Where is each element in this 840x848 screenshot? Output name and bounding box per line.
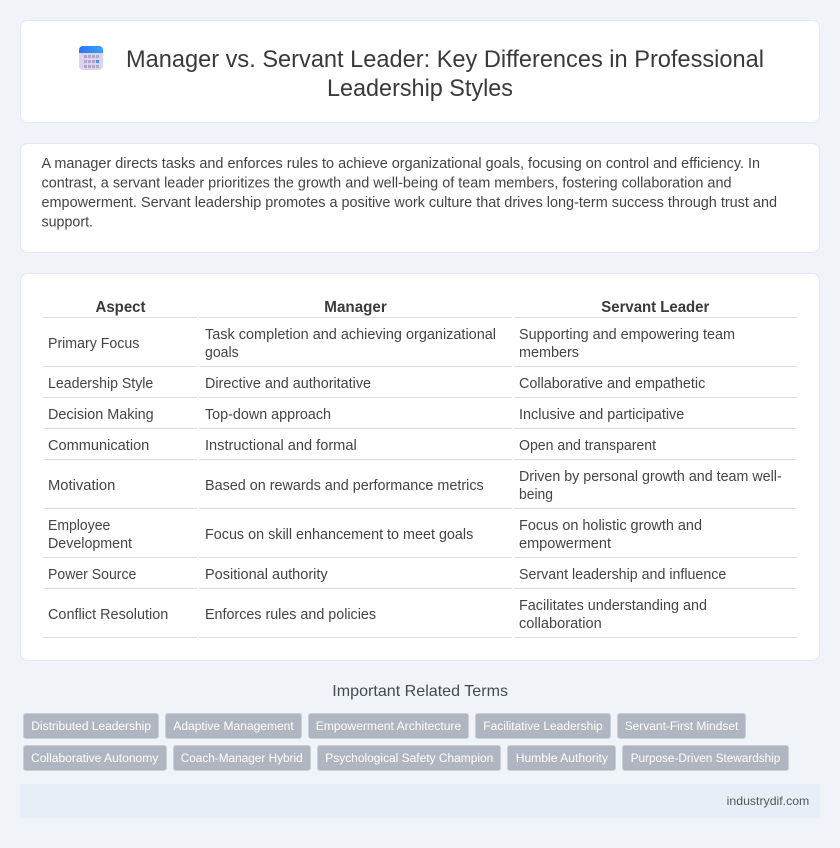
row: decision making: Inclusive and participative [519,407,684,423]
panel: intro text: A manager directs tasks and enforces rules to achieve organizational goals, focusing on control and efficiency. In [42,156,760,172]
panel: title header [20,20,820,122]
chip: psychological safety champion [318,746,500,770]
chip: servant-first mindset [618,714,746,738]
row: motivation: being [519,487,553,503]
row: primary focus: members [519,345,579,361]
table header [43,299,797,318]
chip: facilitative leadership: Facilitative Leadership [483,719,603,733]
row: employee development: Focus on holistic growth and [519,518,702,534]
row: communication: Open and transparent [519,438,656,454]
row: primary focus: Task completion and achieving organizational [205,327,496,343]
row: power source: Power Source [48,567,136,583]
chip: distributed leadership [24,714,158,738]
row: conflict resolution: Facilitates understanding and [519,598,707,614]
row: power source: Positional authority [205,567,329,583]
row: communication: Instructional and formal [205,438,357,454]
chip: distributed leadership: Distributed Leadership [31,719,151,733]
row: decision making [43,407,797,429]
panel: intro text: support. [42,214,93,230]
row: employee development: Employee [48,518,110,534]
chip: coach-manager hybrid: Coach-Manager Hybrid [181,751,303,765]
panel: intro text: contrast, a servant leader prioritizes the growth and well-being of team members, fostering collaboration and [42,176,732,192]
chip: purpose-driven stewardship: Purpose-Driven Stewardship [631,751,781,765]
row: motivation: Driven by personal growth and team well- [519,469,782,485]
panel: intro text [20,144,820,252]
row: leadership style: Leadership Style [48,376,153,392]
chip: humble authority: Humble Authority [516,751,609,765]
row: motivation: Based on rewards and performance metrics [205,478,484,494]
row: conflict resolution: Conflict Resolution [48,607,168,623]
row: conflict resolution [43,598,797,638]
row: communication [43,438,797,460]
row: motivation: Motivation [48,478,115,494]
row: employee development: Development [48,536,132,552]
row: decision making: Decision Making [48,407,154,423]
footer: industrydif.com [727,794,809,808]
row: leadership style: Collaborative and empathetic [519,376,705,392]
row: communication: Communication [48,438,149,454]
chip: adaptive management: Adaptive Management [173,719,294,733]
row: power source [43,567,797,589]
footer [20,784,820,818]
icon: calendar [79,46,103,70]
panel: intro text: empowerment. Servant leadership promotes a positive work culture that drives long-term success through trust and [42,195,777,211]
row: employee development [43,518,797,558]
related term chips [24,714,788,770]
chip: servant-first mindset: Servant-First Mindset [625,719,739,733]
chip: empowerment architecture [308,714,468,738]
chip: collaborative autonomy [24,746,166,770]
chip: humble authority [508,746,616,770]
row: leadership style: Directive and authoritative [205,376,371,392]
chip: adaptive management [166,714,302,738]
row: employee development: Focus on skill enhancement to meet goals [205,527,473,543]
row: motivation [43,469,797,509]
chip: coach-manager hybrid [174,746,310,770]
row: conflict resolution: collaboration [519,616,602,632]
chip: facilitative leadership [476,714,610,738]
title [126,46,764,102]
row: primary focus: Supporting and empowering team [519,327,735,343]
heading: important related terms: Important Related Terms [332,683,508,700]
title: Manager vs. Servant Leader: Key Differences in Professional [126,46,764,73]
row: power source: Servant leadership and influence [519,567,726,583]
row: employee development: empowerment [519,536,611,552]
row: leadership style [43,376,797,398]
title: Leadership Styles [327,75,513,102]
row: decision making: Top-down approach [205,407,331,423]
chip: empowerment architecture: Empowerment Architecture [316,719,462,733]
row: primary focus: goals [205,345,239,361]
chip: collaborative autonomy: Collaborative Autonomy [31,751,159,765]
row: primary focus: Primary Focus [48,336,139,352]
chip: purpose-driven stewardship [622,746,788,770]
table header: Servant Leader [601,299,709,316]
chip: psychological safety champion: Psychological Safety Champion [325,751,493,765]
row: conflict resolution: Enforces rules and policies [205,607,376,623]
row: primary focus [43,327,797,367]
panel: comparison table [20,274,820,660]
table header: Aspect [96,299,146,316]
table header: Manager [324,299,387,316]
